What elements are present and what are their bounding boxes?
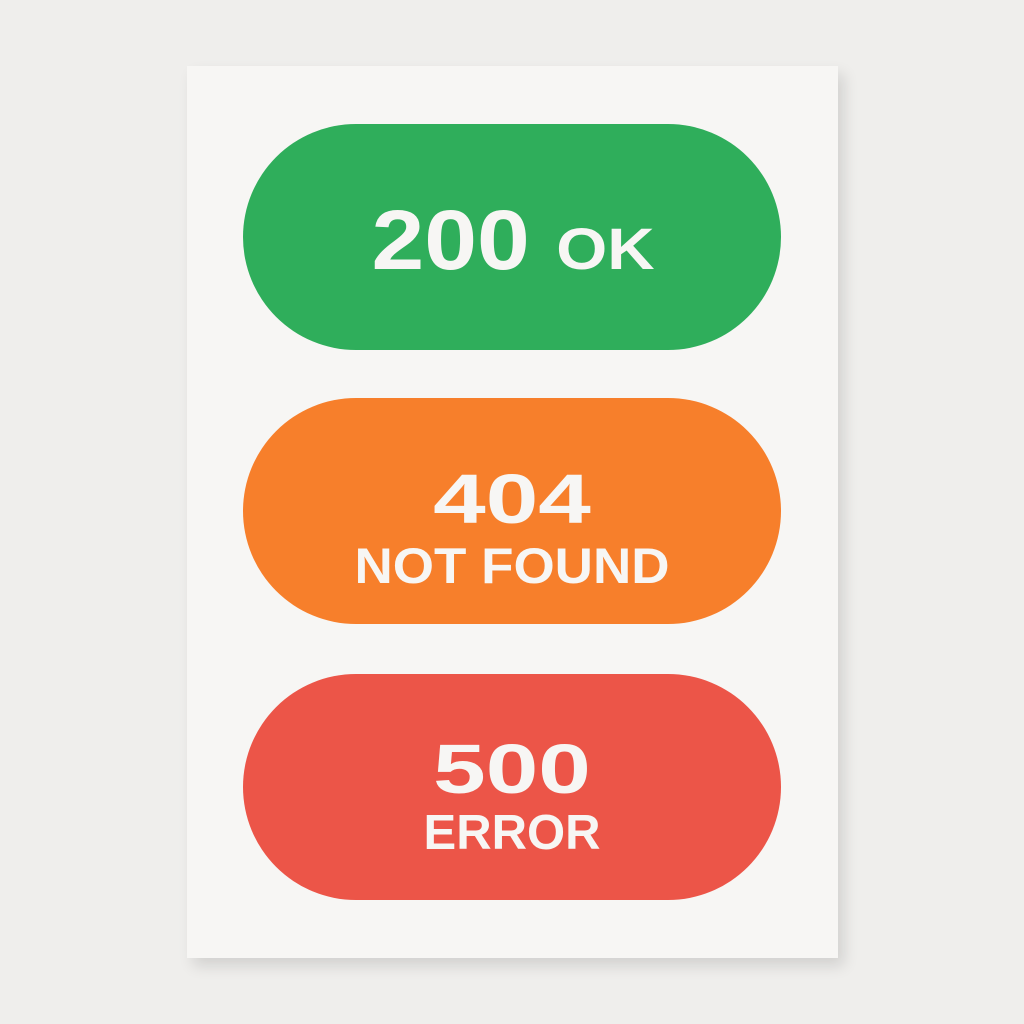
pill: 404 NOT FOUND: NOT FOUND bbox=[354, 538, 670, 594]
pill: 500 ERROR: 500 bbox=[433, 730, 591, 808]
pill: 500 ERROR bbox=[243, 674, 781, 900]
pill: 200 OK bbox=[243, 124, 781, 350]
pill: 404 NOT FOUND: 404 bbox=[433, 460, 591, 538]
panel: poster card bbox=[187, 66, 838, 958]
pill: 404 NOT FOUND bbox=[243, 398, 781, 624]
pill: 200 OK: 200 OK bbox=[371, 193, 655, 287]
pill: 500 ERROR: ERROR bbox=[424, 806, 600, 860]
